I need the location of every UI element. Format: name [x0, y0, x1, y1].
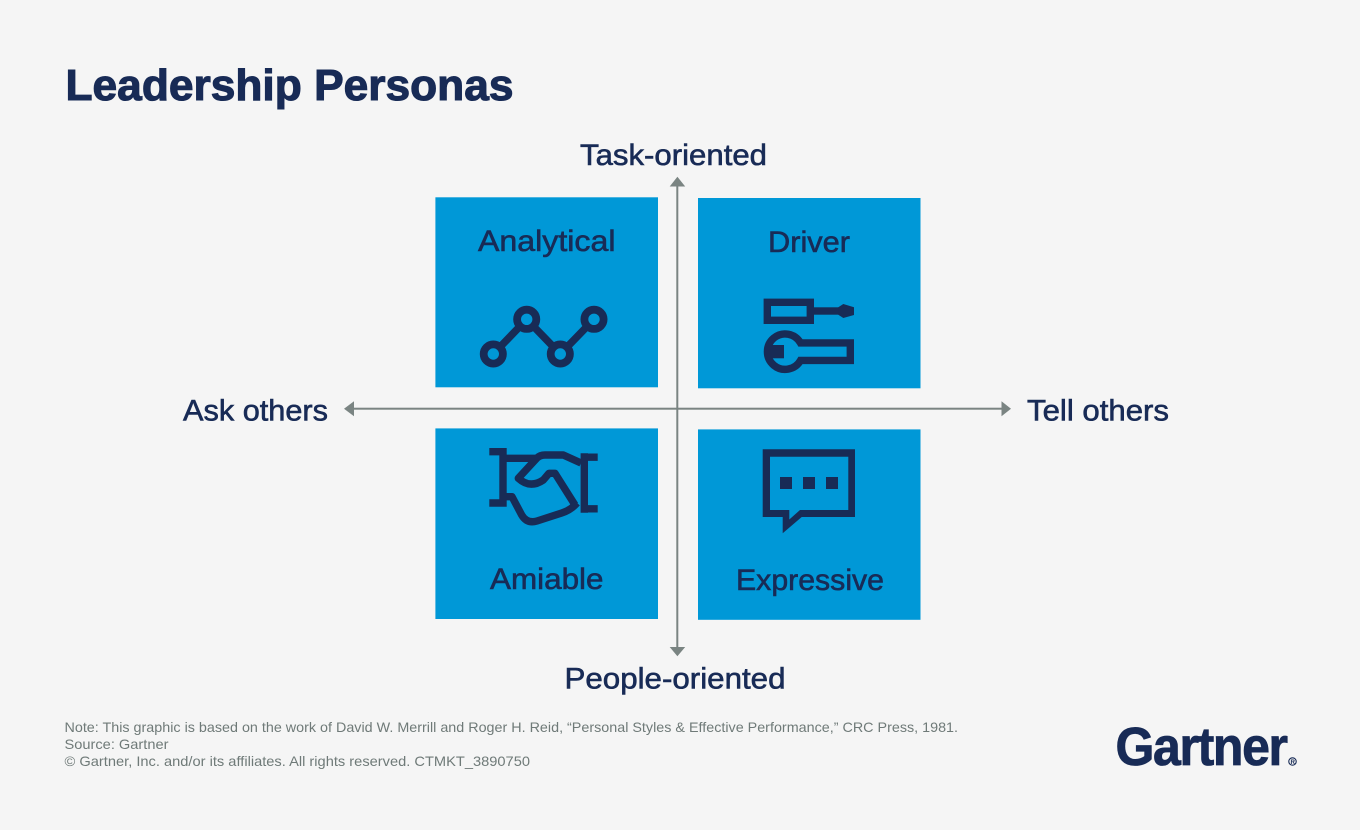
icon: screwdriver and wrench [767, 302, 854, 369]
icon: handshake [489, 448, 598, 522]
arrow: horizontal axis [344, 401, 1011, 416]
heading: amiable: Amiable [490, 563, 604, 596]
title: Leadership Personas [66, 61, 514, 110]
axis label: people-oriented: People-oriented [564, 662, 786, 696]
axis label: tell others: Tell others [1027, 395, 1169, 428]
panel: analytical [435, 197, 658, 387]
footnote: Note: This graphic is based on the work of David W. Merrill and Roger H. Reid, “Personal Styles & Effective Performance,” CRC Press, 1981. [64, 719, 958, 735]
axis label: task-oriented: Task-oriented [580, 139, 767, 172]
footnote [64, 719, 958, 769]
footnote: © Gartner, Inc. and/or its affiliates. All rights reserved. CTMKT_3890750 [64, 753, 530, 769]
panel: expressive [698, 429, 920, 620]
footnote: Source: Gartner [64, 736, 169, 752]
heading: expressive: Expressive [736, 564, 884, 597]
icon: line chart nodes [484, 310, 604, 364]
logo: gartner: R [1290, 759, 1296, 766]
heading: driver: Driver [768, 226, 850, 259]
heading: analytical: Analytical [478, 225, 616, 258]
panel: driver [698, 198, 920, 388]
arrow: vertical axis [670, 177, 685, 656]
icon: speech bubble [763, 449, 855, 533]
axis label: ask others: Ask others [183, 395, 328, 428]
logo: gartner: Gartner [1116, 717, 1288, 777]
panel: amiable [435, 428, 658, 619]
